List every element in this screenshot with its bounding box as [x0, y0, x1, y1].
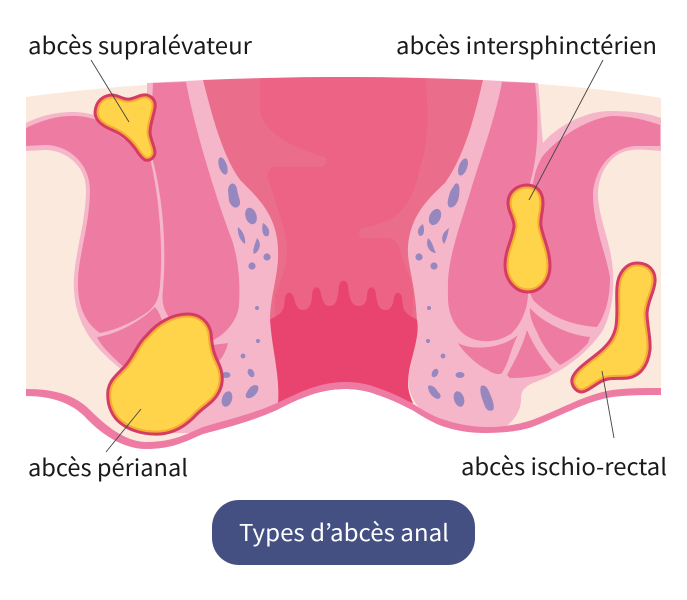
abscess: ischio-rectal [572, 263, 655, 392]
leader line: intersphinctérien [529, 60, 603, 200]
purple glands, left [216, 156, 271, 408]
left light pink sheath [26, 80, 278, 433]
right sphincter column [448, 82, 537, 341]
label: abcès périanal: abcès périanal [28, 449, 188, 483]
right light pink sheath [408, 80, 661, 430]
rectum wall [203, 77, 483, 320]
left lower wedges [97, 307, 228, 372]
anal canal folds [270, 281, 418, 404]
abscess: périanal [108, 314, 222, 434]
leader line: périanal [106, 409, 141, 452]
cream background tissue [26, 77, 661, 450]
purple glands, right [415, 157, 494, 411]
white mask below perineum [20, 389, 670, 470]
right levator muscle [530, 116, 660, 327]
left levator muscle [26, 116, 161, 333]
label: abcès intersphinctérien: abcès intersphinctérien [396, 27, 657, 61]
label: abcès supralévateur: abcès supralévateur [28, 27, 252, 61]
title text: Types d’abcès anal [239, 514, 449, 548]
abscess: supralévateur [95, 95, 155, 160]
title button [212, 500, 475, 565]
abscess: intersphinctérien [505, 185, 550, 292]
left sphincter column [150, 82, 239, 345]
leader line: supralévateur [91, 60, 129, 122]
skin band [26, 382, 661, 449]
leader line: ischio-rectal [602, 371, 614, 438]
anatomical illustration [20, 77, 670, 470]
label: abcès ischio-rectal: abcès ischio-rectal [461, 448, 667, 482]
right lower wedges [458, 308, 590, 378]
rectum lumen centre [260, 77, 428, 315]
